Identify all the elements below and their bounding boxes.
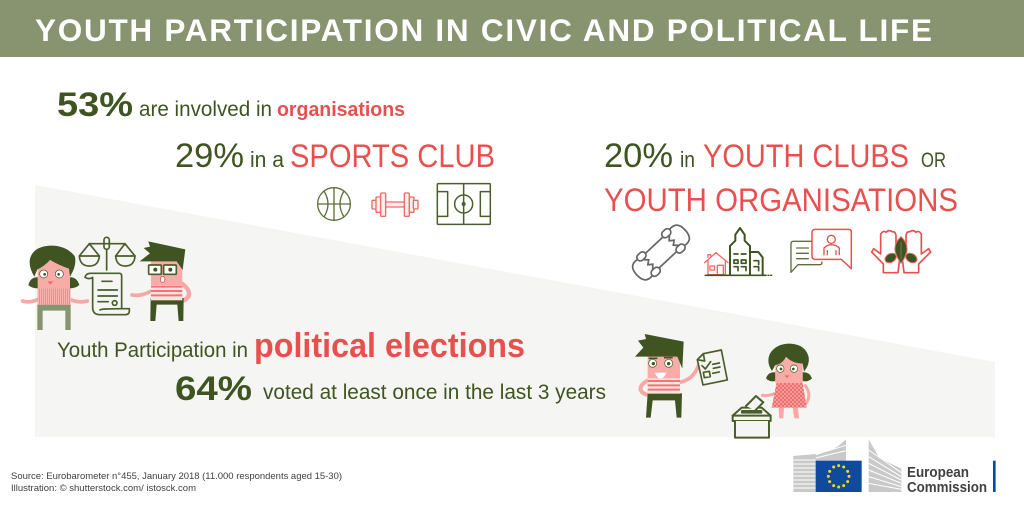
logo: European Commission xyxy=(793,439,996,496)
source note: Source: Eurobarometer n°455, January 2018 (11.000 respondents aged 15-30) xyxy=(11,471,342,482)
heading: 53% involved in organisations xyxy=(57,86,405,124)
illustration: girl with polka dot dress xyxy=(762,344,812,418)
heading: youth participation in political elections: Youth Participation in xyxy=(57,339,248,362)
header band with title xyxy=(0,0,1024,57)
icon: dumbbell xyxy=(372,193,418,216)
stat: 64% voted at least once: 64% xyxy=(175,370,252,408)
stat: 20% in youth clubs or youth organisations: 20% xyxy=(604,137,673,175)
header band with title: YOUTH PARTICIPATION IN CIVIC AND POLITICAL LIFE xyxy=(35,12,932,48)
stat: 64% voted at least once: voted at least once in the last 3 years xyxy=(263,381,606,404)
stat: 20% in youth clubs or youth organisations xyxy=(604,137,958,218)
stat: 29% in a sports club: SPORTS CLUB xyxy=(290,138,495,174)
source note xyxy=(11,471,342,494)
illustration: girl left xyxy=(23,246,87,330)
stat: 64% voted at least once xyxy=(175,370,606,408)
icon: scales of justice xyxy=(79,237,135,270)
icon: basketball xyxy=(318,188,350,220)
illustration: young man holding checklist xyxy=(635,334,699,418)
logo: European Commission: European xyxy=(907,465,969,481)
stat: 29% in a sports club xyxy=(175,137,495,175)
icon: checklist paper xyxy=(697,350,727,385)
stat: 20% in youth clubs or youth organisations: YOUTH ORGANISATIONS xyxy=(604,182,958,218)
heading: 53% involved in organisations: are involved in xyxy=(139,98,272,121)
heading: 53% involved in organisations: 53% xyxy=(57,86,133,124)
heading: 53% involved in organisations: organisations xyxy=(277,99,405,121)
icon: legal scroll document xyxy=(85,273,129,315)
icon: hands holding leaves xyxy=(872,231,931,273)
icon: speech bubbles with person xyxy=(791,229,851,272)
background panel: grey wedge xyxy=(35,185,995,437)
heading: youth participation in political elections xyxy=(57,327,525,365)
stat: 20% in youth clubs or youth organisations: YOUTH CLUBS xyxy=(703,138,909,174)
icon: football pitch xyxy=(437,184,490,224)
icon: skateboard xyxy=(627,220,695,285)
stat: 29% in a sports club: 29% xyxy=(175,137,244,175)
icon: ballot box xyxy=(733,396,771,438)
logo: European Commission: Commission xyxy=(907,480,987,496)
stat: 29% in a sports club: in a xyxy=(250,147,285,172)
stat: 20% in youth clubs or youth organisations: in xyxy=(680,147,695,172)
source note: Illustration: © shutterstock.com/ istosck.com xyxy=(11,483,196,494)
illustration: man with glasses xyxy=(132,241,189,321)
stat: 20% in youth clubs or youth organisations: OR xyxy=(921,149,946,172)
heading: youth participation in political elections: political elections xyxy=(254,327,525,365)
icon: house and city building xyxy=(705,228,772,275)
